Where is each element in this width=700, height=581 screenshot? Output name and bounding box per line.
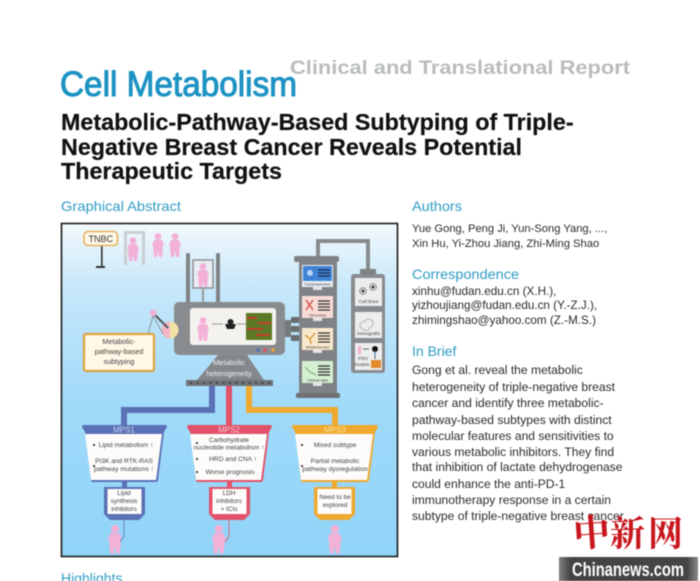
metabolic heterogeneity funnel: heterogeneity [206,369,252,378]
in brief: cancer and identify three metabolic- [412,396,604,410]
MPS2 column: nucleotide metabolism ↑ [194,444,264,452]
graphical abstract heading: Graphical Abstract [61,198,181,214]
MPS2 column: MPS2 [218,426,240,434]
in brief: molecular features and sensitivities to [412,429,614,443]
monitor: genomics: Genomics [309,314,326,318]
graphical abstract panel [62,224,398,556]
patients at scanner [124,231,181,265]
MPS1 column: Lipid [117,490,131,497]
in brief: immunotherapy response in a certain [412,493,611,507]
monitor: genomics [302,296,333,321]
MPS2 column: + ICIs [221,506,237,513]
correspondence: Correspondence [412,266,519,282]
watermark: Chinese logo: 新 [610,507,645,557]
correspondence: zhimingshao@yahoo.com (Z.-M.S.) [412,314,596,327]
metabolic heterogeneity funnel [186,355,273,386]
MPS1 column: MPS1 [113,426,135,434]
cell lines: Cell lines [359,299,379,305]
in brief: pathway-based subtypes with distinct [412,413,612,427]
pipes [318,241,368,270]
in brief: subtype of triple-negative breast cancer. [412,509,626,523]
monitor: metabolomics [302,328,333,353]
correspondence [412,266,597,327]
metabolic subtyping label: subtyping [104,357,134,366]
MPS1 column: pathway mutations ↑ [94,466,154,473]
in brief: heterogeneity of triple-negative breast [412,380,616,394]
authors [412,198,607,250]
article title: Negative Breast Cancer Reveals Potential [61,134,522,160]
authors: Authors [412,198,462,214]
monitor: clinical data: Clinical data [307,378,329,382]
metabolic subtyping label [84,334,154,371]
monitor: transcriptomics [302,265,333,290]
in brief: Gong et al. reveal the metabolic [412,363,583,377]
article title [61,109,574,184]
MPS2 column: Worse prognosis [205,469,255,476]
watermark: Chinese logo [571,502,683,558]
monitor: clinical data [302,361,333,386]
MPS2 column: HRD and CNA ↑ [209,456,257,463]
authors: Yue Gong, Peng Ji, Yun-Song Yang, ..., [412,223,607,235]
MPS2 column: LDH [223,490,236,497]
MPS3 column: Partial metabolic [311,458,360,465]
metabolic probe [148,310,178,338]
article title: Metabolic-Pathway-Based Subtyping of Triple- [61,109,574,135]
TNBC sign [84,232,118,268]
MPS3 column: pathway dysregulation [302,466,368,473]
PDO models: models [355,362,370,367]
report type: Clinical and Translational Report [290,57,631,79]
MPS3 column: MPS3 [324,426,346,434]
in brief: could enhance the anti-PD-1 [412,477,566,491]
MPS2 column: inhibitors [216,498,242,505]
MPS1 column [82,425,167,554]
MPS2 column [187,425,272,554]
in brief [412,343,626,523]
correspondence: yizhoujiang@fudan.edu.cn (Y.-Z.J.), [412,299,597,312]
MPS1 column: synthesis [111,498,137,505]
metabolic subtyping label: pathway-based [95,347,143,356]
metabolic heterogeneity funnel: Metabolic [213,358,245,367]
metabolic subtyping label: Metabolic- [102,337,136,346]
validation models cabinet [351,269,385,373]
in brief: various metabolic inhibitors. They find [412,445,614,459]
monitor: transcriptomics: Transcriptomics [304,282,331,286]
MPS3 column: Mixed subtype [314,442,357,449]
omics tower [294,256,340,398]
MPS3 column: Need to be [319,494,351,501]
watermark: Chinese logo: 网 [648,507,683,557]
in brief: that inhibition of lactate dehydrogenase [412,460,623,474]
journal name: Cell Metabolism [60,65,297,104]
MPS1 column: PI3K and RTK-RAS [95,458,153,465]
in brief: In Brief [412,343,456,359]
authors: Xin Hu, Yi-Zhou Jiang, Zhi-Ming Shao [412,238,599,250]
watermark: Chinese logo: 中 [571,502,612,558]
MPS3 column [292,425,378,554]
analysis machine [174,253,299,355]
correspondence: xinhu@fudan.edu.cn (X.H.), [412,285,556,298]
subtype connectors [124,386,335,425]
MPS2 column: Carbohydrate [209,437,249,444]
xenografts: Xenografts [357,331,381,337]
PDO models: PDO [358,356,368,361]
PDO models [355,343,382,370]
article title: Therapeutic Targets [61,158,282,184]
TNBC sign: TNBC [89,234,114,244]
monitor: metabolomics: Metabolomics [306,346,329,350]
MPS3 column: explored [323,502,348,509]
MPS1 column: inhibitors [111,506,137,513]
MPS1 column: Lipid metabolism ↑ [99,442,153,449]
